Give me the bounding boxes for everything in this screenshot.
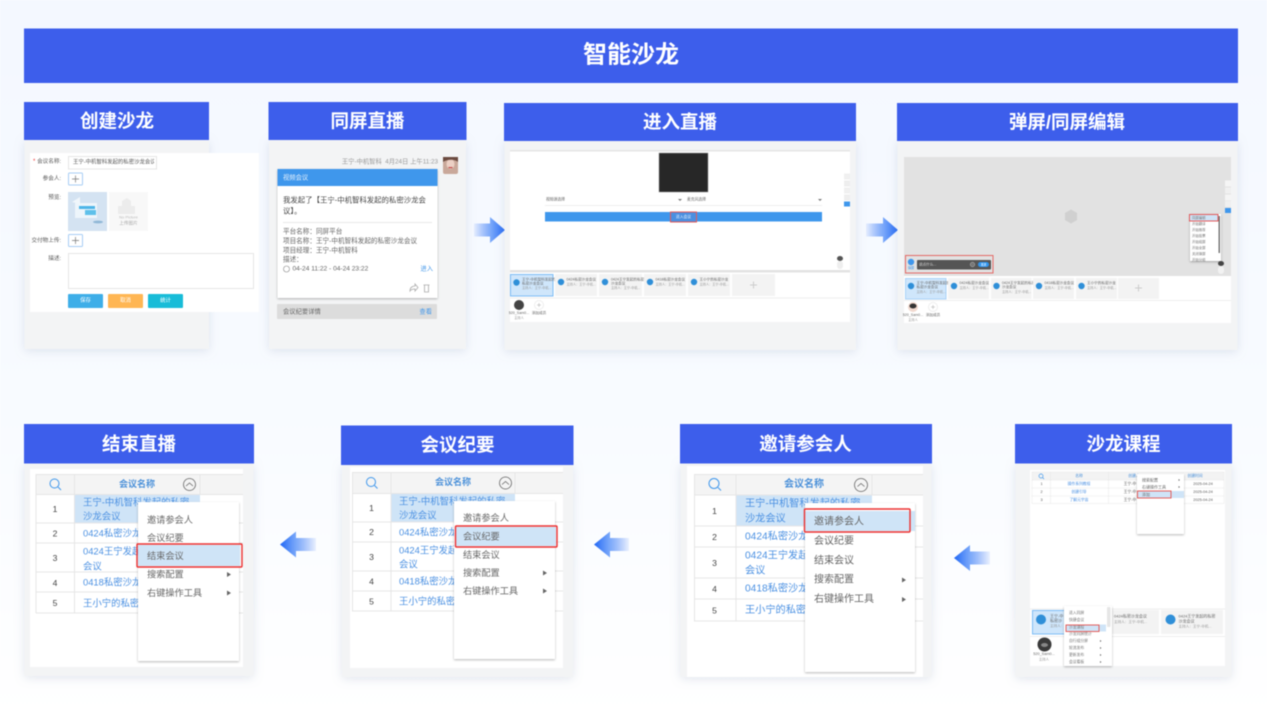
bullet comment bar: 弹屏 (908, 265, 915, 270)
title banner: 智能沙龙 (583, 42, 679, 68)
context menu: 同屏编辑 (1192, 215, 1206, 220)
context menu: salon course (1064, 606, 1112, 666)
context menu: 开始推荐 (1192, 227, 1206, 232)
table screenshot: 王小宁的私密沙龙 (745, 603, 826, 616)
thumbnails (1032, 610, 1223, 634)
thumbnails: 0424王宁发起的私密 (1002, 280, 1036, 285)
table screenshot: 王宁-中机智科发起的私密 (745, 496, 860, 510)
heading: 结束直播: 结束直播 (102, 434, 176, 454)
table screenshot: 1 (369, 503, 374, 513)
table screenshot: 王宁-中机智科发起的私密 (399, 496, 505, 506)
table screenshot: 5 (369, 596, 374, 606)
thumbnails: 王宁-中机智科发起的 (522, 276, 556, 282)
context menu: salon course: 更新发布 (1069, 652, 1084, 657)
table screenshot: 沙龙会议 (83, 510, 121, 522)
form screenshot: * (33, 159, 36, 165)
context menu: salon course: 自行组分屏 (1069, 638, 1088, 643)
table screenshot: 1 (712, 506, 717, 516)
form screenshot: 参会人: (43, 174, 61, 182)
table screenshot: 0418私密沙龙会议 (745, 582, 829, 594)
table screenshot: 2 (369, 527, 374, 537)
participant row: 主持人 (908, 317, 919, 322)
avatar (443, 157, 458, 174)
participant row: 添加成员 (926, 312, 941, 317)
thumbnails: 主持人：王宁-中机... (1002, 289, 1031, 294)
context menu: 右键操作工具 (463, 585, 518, 596)
toolbar (1225, 180, 1231, 213)
table screenshot: 5 (712, 606, 717, 616)
chat message: 项目名称：王宁-中机智科发起的私密沙龙会议 (283, 236, 417, 245)
editing screenshot (903, 157, 1231, 323)
table screenshot: 0418私密沙龙会议 (399, 576, 477, 586)
context menu: 邀请参会人 (147, 514, 193, 525)
participant row: 520_Sam0... (903, 313, 923, 317)
context menu: add: 搜索配置 (1142, 476, 1158, 482)
thumbnails: 主持人：王宁-中机... (1114, 619, 1147, 624)
placeholder image: 上传图片 (119, 220, 138, 226)
thumbnails: 0424私密沙龙会议 (960, 280, 989, 285)
context menu: salon course: 沙龙课程 (1069, 624, 1084, 630)
table screenshot: 4 (712, 584, 717, 594)
context menu: 搜索配置 (147, 568, 184, 580)
placeholder image (109, 192, 148, 231)
course screenshot: 了解元宇宙 (1070, 497, 1089, 502)
participant (1033, 638, 1055, 662)
table screenshot: 3 (53, 553, 58, 563)
thumbnails: 主持人：王宁-中机... (611, 285, 640, 290)
icon: robot (837, 256, 843, 269)
panel: 创建沙龙 (24, 102, 259, 349)
live setup screenshot: 视频源选择 (546, 196, 565, 202)
panel: 邀请参会人 (680, 424, 932, 677)
table screenshot: 会议名称 (435, 476, 471, 487)
heading: 会议纪要: 会议纪要 (420, 434, 495, 456)
thumbnails: 沙龙会议 (1178, 618, 1194, 624)
context menu (454, 501, 557, 659)
context menu: add: 右键操作工具 (1142, 484, 1166, 490)
panel: 弹屏/同屏编辑 (897, 103, 1238, 350)
thumbnails: 0424私密沙龙会议 (1114, 612, 1147, 618)
footer: 会议纪要详情: 会议纪要详情 (283, 306, 321, 316)
course screenshot: 3 (1040, 498, 1043, 502)
context menu: salon course: 沙龙同屏统计 (1069, 631, 1092, 636)
table screenshot (687, 466, 923, 677)
heading: 弹屏/同屏编辑 (897, 103, 1238, 141)
thumbnails (510, 274, 775, 296)
thumbnails: 主持人：王宁-中机... (566, 282, 596, 286)
heading: 同屏直播 (268, 102, 466, 140)
context menu: 搜索配置 (463, 567, 500, 578)
course screenshot (1030, 470, 1225, 666)
thumbnails: 主持人：王宁-中机... (522, 285, 551, 290)
participant: 主持人 (1039, 656, 1050, 662)
arrow (954, 545, 990, 571)
form screenshot: 王宁-中机智科发起的私密沙龙会议 (73, 158, 156, 166)
thumbnails: 主持人：王宁-中机... (1087, 285, 1116, 290)
thumbnails: 私密沙龙会议 (916, 284, 938, 289)
table screenshot: 2 (53, 528, 58, 538)
context menu: 邀请参会人 (814, 514, 864, 528)
heading: 邀请参会人: 邀请参会人 (759, 434, 852, 454)
table screenshot: 0424私密沙龙会议 (399, 526, 477, 538)
chat message: 进入 (420, 264, 434, 272)
title banner (24, 28, 1238, 83)
context menu: 开始组屏 (1192, 239, 1206, 244)
arrow (474, 217, 505, 243)
heading: 进入直播 (504, 103, 856, 141)
context menu: 邀请参会人 (463, 512, 509, 523)
arrow (280, 532, 316, 558)
context menu: 开始投票 (1192, 233, 1206, 238)
table screenshot: 1 (53, 504, 58, 514)
heading: 弹屏/同屏编辑: 弹屏/同屏编辑 (1009, 112, 1125, 132)
panel: 进入直播 (504, 103, 856, 350)
chat message: 平台名称：同屏平台 (283, 226, 343, 236)
table screenshot: 0424私密沙龙会议 (745, 530, 829, 542)
table screenshot: 会议 (399, 558, 418, 570)
table screenshot: 会议 (745, 564, 765, 576)
thumbnails: 主持人：王宁-中机... (916, 289, 946, 294)
context menu: 会议纪要 (147, 532, 184, 543)
table screenshot (350, 467, 563, 668)
panel: 同屏直播 (268, 102, 466, 349)
thumbnails: 主持人：王宁-中机... (656, 282, 685, 286)
table screenshot: 0424王宁发起的私密沙龙 (83, 546, 188, 556)
table screenshot: 会议 (83, 560, 102, 572)
panel: 沙龙课程 (1015, 424, 1232, 677)
course screenshot: 创建引导 (1071, 489, 1087, 494)
table screenshot: 王小宁的私密沙龙 (399, 596, 474, 606)
bullet comment bar: 发送 (981, 262, 986, 266)
course screenshot: 创建时间 (1187, 473, 1203, 478)
icon: search (50, 479, 61, 490)
form screenshot: 会议名称: (37, 157, 61, 165)
thumbnails: 主持人：王宁-中机... (1044, 285, 1074, 290)
icon: robot (1218, 261, 1224, 274)
context menu: 关闭弹屏 (1192, 251, 1206, 256)
participant row: 添加成员 (532, 310, 547, 315)
form screenshot (30, 153, 259, 312)
heading: 同屏直播: 同屏直播 (330, 110, 405, 132)
course screenshot: 操作系列教程 (1068, 481, 1091, 486)
table screenshot: 会议名称 (784, 477, 824, 490)
toolbar (844, 174, 850, 206)
heading: 结束直播 (24, 424, 254, 464)
thumbnails: 0424私密沙龙会议 (566, 276, 596, 282)
icon: search (366, 478, 378, 488)
bullet comment bar (906, 256, 993, 273)
icon: search (709, 478, 721, 490)
heading: 进入直播: 进入直播 (643, 112, 717, 132)
table screenshot: 王宁-中机智科发起的私密 (83, 496, 189, 508)
course screenshot: 2 (1040, 490, 1043, 494)
thumbnails: 王小宁的私密沙龙 (700, 276, 729, 282)
table screenshot: 2 (712, 532, 717, 542)
context menu: salon course: 轮流发布 (1069, 645, 1084, 650)
thumbnails: 主持人：王宁-中机... (960, 285, 989, 290)
context menu: 会议纪要 (814, 534, 854, 547)
course screenshot: 1 (1040, 482, 1043, 486)
footer: 会议纪要详情 (277, 304, 437, 319)
panel: 会议纪要 (341, 426, 574, 677)
course screenshot: 2025-04-24 (1193, 498, 1213, 502)
context menu: salon course: 会议看板 (1069, 659, 1084, 664)
live setup screenshot (509, 150, 850, 322)
thumbnails: 0424王宁发起的私密 (611, 276, 645, 282)
panel: 结束直播 (24, 424, 254, 676)
context menu (137, 502, 242, 661)
course screenshot: 名称 (1075, 473, 1083, 478)
context menu: 右键操作工具 (147, 587, 202, 598)
table screenshot: 会议名称 (119, 478, 155, 489)
buttons: 统计 (160, 296, 171, 304)
thumbnails: 沙龙会议 (611, 280, 626, 286)
chat message: 议】。 (283, 206, 301, 216)
arrow (594, 532, 629, 558)
heading: 沙龙课程: 沙龙课程 (1086, 434, 1161, 454)
course screenshot: 创建人 (1128, 473, 1140, 478)
bullet comment bar: 说点什么... (919, 262, 936, 266)
table screenshot: 3 (369, 552, 374, 562)
thumbnails: 0418私密沙龙会议 (1044, 280, 1074, 285)
preview image (68, 192, 107, 231)
table screenshot: 0424私密沙龙会议 (83, 528, 161, 538)
table screenshot: 5 (53, 598, 58, 608)
thumbnails: 主持人： (1050, 623, 1064, 628)
thumbnails: 王小宁的私密沙龙 (1087, 280, 1116, 285)
thumbnails: 0418私密沙龙会议 (656, 276, 685, 282)
buttons (68, 294, 183, 308)
thumbnails: 0424王宁发起的私密 (1178, 612, 1215, 618)
table screenshot (30, 469, 243, 667)
context menu: 开始全屏 (1192, 245, 1206, 250)
heading: 邀请参会人 (680, 424, 932, 464)
context menu: 结束会议 (463, 549, 500, 560)
context menu: 会议纪要 (463, 530, 500, 542)
context menu: add (1137, 474, 1184, 534)
placeholder image: No Picture (119, 214, 139, 220)
participant row: 520_Sam0... (509, 311, 529, 315)
heading: 沙龙课程 (1015, 424, 1232, 464)
chat message: 视频会议 (283, 172, 309, 182)
chat message: 04-24 11:22 - 04-24 23:22 (292, 266, 369, 272)
table screenshot: 3 (712, 558, 717, 568)
chat message: 我发起了【王宁-中机智科发起的私密沙龙会 (283, 196, 426, 204)
context menu: 开始分组 (1192, 257, 1206, 262)
context menu: 结束会议 (814, 554, 854, 566)
table screenshot: 0424王宁发起的私密沙龙 (399, 544, 504, 556)
table screenshot: 王小宁的私密沙龙 (83, 598, 158, 608)
icon: logo watermark (1065, 210, 1077, 224)
chat message: 王宁-中机智科 4月24日 上午11:23 (342, 156, 438, 166)
participant row (903, 302, 941, 322)
participant row (509, 300, 547, 320)
live setup screenshot: 进入会议 (676, 214, 691, 219)
buttons: 保存 (80, 296, 91, 304)
context menu: 搜索配置 (814, 572, 854, 586)
participant: 520_Sam0... (1033, 652, 1055, 656)
thumbnails: 主持人：王宁-中机... (1178, 624, 1211, 628)
buttons: 取消 (120, 296, 131, 304)
arrow (866, 217, 898, 243)
context menu: 开始翻译 (1192, 221, 1206, 226)
table screenshot: 4 (369, 576, 374, 586)
form screenshot: 交付物上传: (31, 236, 61, 244)
context menu: salon course: 快捷会议 (1069, 617, 1084, 622)
thumbnails: 沙龙会议 (1002, 284, 1017, 289)
icons: share and delete (410, 284, 430, 292)
context menu: 结束会议 (147, 550, 184, 561)
course screenshot: 2025-04-24 (1193, 490, 1213, 494)
thumbnails: 主持人：王宁-中机... (700, 282, 729, 286)
icon: search (1039, 474, 1044, 479)
context menu: 右键操作工具 (814, 592, 874, 605)
course screenshot: 2025-04-24 (1193, 482, 1213, 486)
chat message (277, 156, 458, 319)
heading: 创建沙龙: 创建沙龙 (80, 110, 154, 132)
table screenshot: 0418私密沙龙会议 (83, 576, 161, 588)
table screenshot: 0424王宁发起的私密沙龙 (745, 548, 859, 562)
heading: 创建沙龙 (24, 102, 209, 140)
table screenshot: 沙龙会议 (745, 512, 786, 524)
thumbnails: 私密沙 (1050, 617, 1062, 623)
course screenshot: 王宁-中 (1124, 497, 1137, 502)
context menu (804, 503, 915, 672)
chat message: 描述： (283, 254, 303, 264)
chat message: 项目经理：王宁-中机智科 (283, 246, 358, 254)
table screenshot: 沙龙会议 (399, 510, 437, 520)
thumbnails (906, 278, 1159, 299)
context menu: salon course: 进入同屏 (1069, 610, 1084, 615)
course screenshot: 王宁-中 (1124, 481, 1137, 486)
form screenshot: 预览: (48, 193, 61, 201)
form screenshot: 描述: (48, 254, 61, 262)
thumbnails: 王宁-中 (1050, 612, 1063, 618)
course screenshot: 王宁-中 (1124, 489, 1137, 494)
table screenshot: 4 (53, 578, 58, 588)
footer: 会议纪要详情: 查看 (419, 306, 432, 316)
participant row: 主持人 (514, 315, 525, 320)
thumbnails: 私密沙龙会议 (522, 280, 544, 286)
context menu (1190, 214, 1221, 262)
live setup screenshot: 麦克风选择 (687, 196, 706, 202)
heading: 会议纪要 (341, 426, 574, 465)
thumbnails: 王宁-中机智科发起的 (916, 280, 950, 285)
context menu: add: 添加 (1142, 491, 1150, 497)
